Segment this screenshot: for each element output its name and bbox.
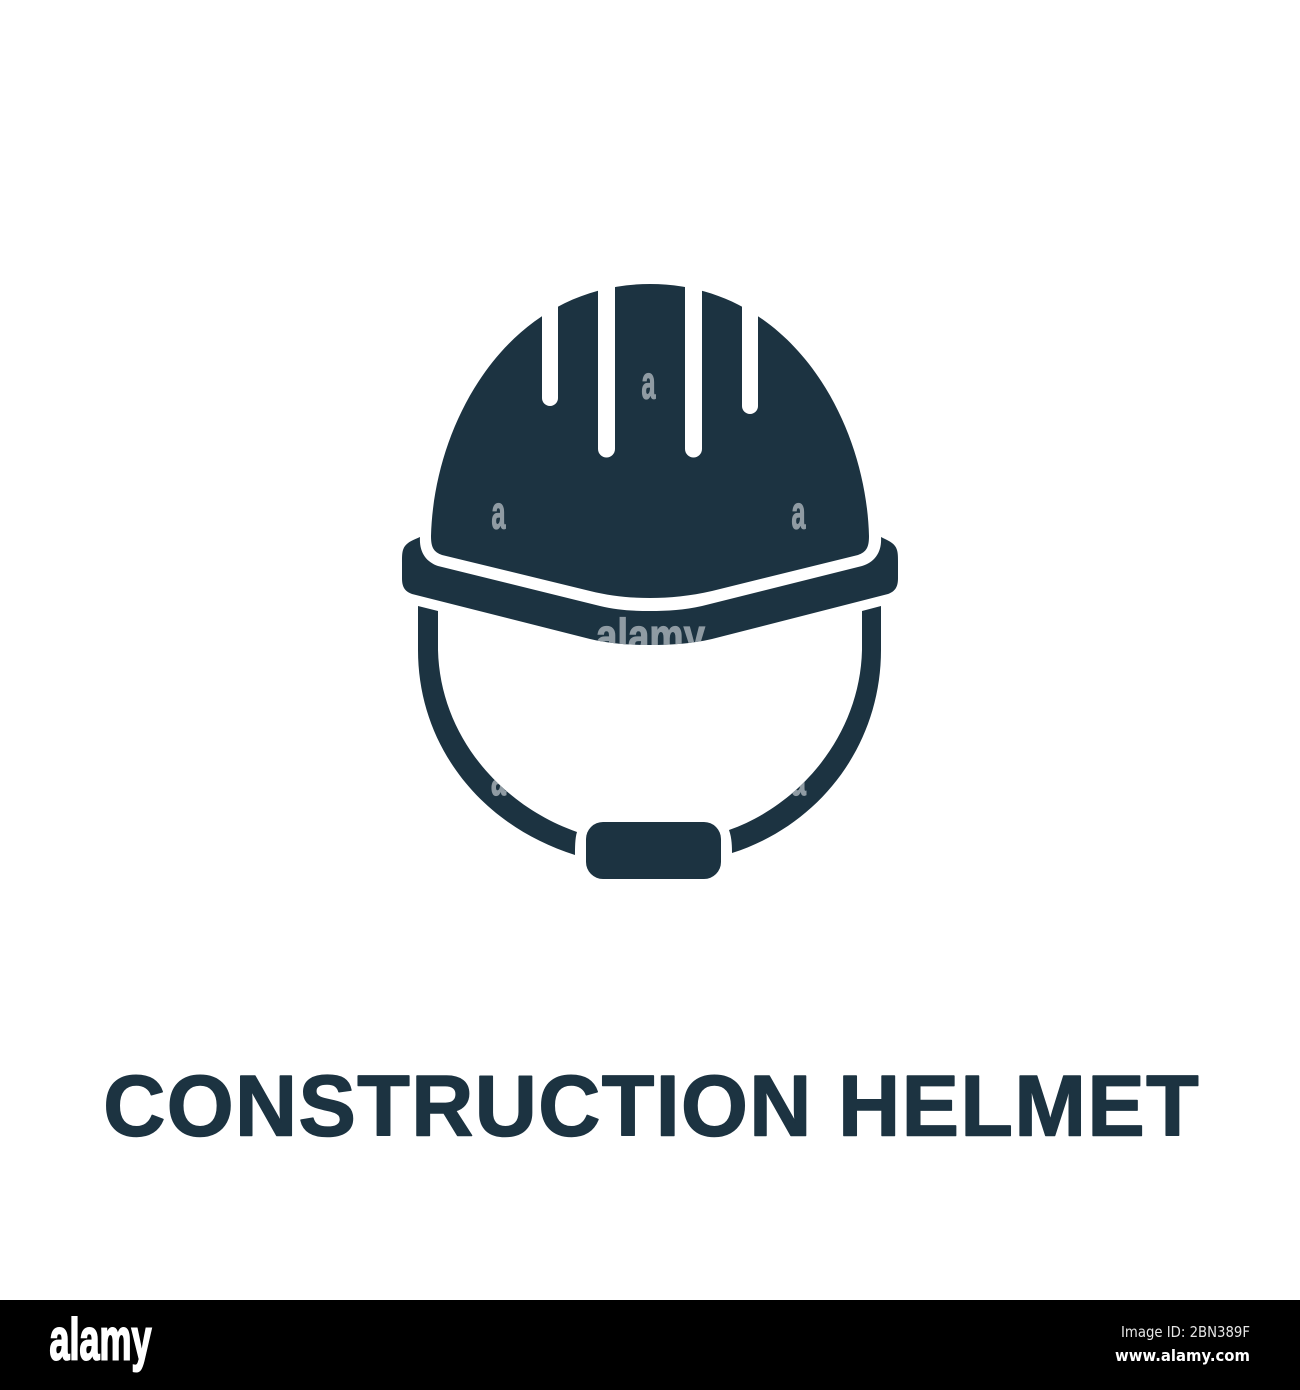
watermarks: alamy (596, 609, 705, 662)
title: CONSTRUCTION HELMET (103, 1059, 1199, 1155)
watermarks: a (791, 752, 806, 805)
watermarks: a (492, 486, 506, 538)
infographic canvas (0, 284, 1300, 1390)
helmet brim (402, 537, 898, 645)
helmet dome with ventilation stripes (431, 280, 869, 598)
image id: Image ID: 2BN389F (1121, 1323, 1250, 1341)
chin strap left (418, 606, 577, 855)
footer bar (0, 1300, 1300, 1390)
watermarks (491, 356, 806, 805)
chin buckle (586, 822, 721, 879)
chin strap right (729, 606, 881, 853)
website: www.alamy.com (1115, 1346, 1250, 1365)
icon: construction helmet (402, 280, 898, 879)
watermarks: a (792, 486, 806, 538)
watermarks: a (642, 356, 656, 408)
watermarks: a (491, 752, 506, 805)
footer logo: alamy (50, 1308, 152, 1372)
